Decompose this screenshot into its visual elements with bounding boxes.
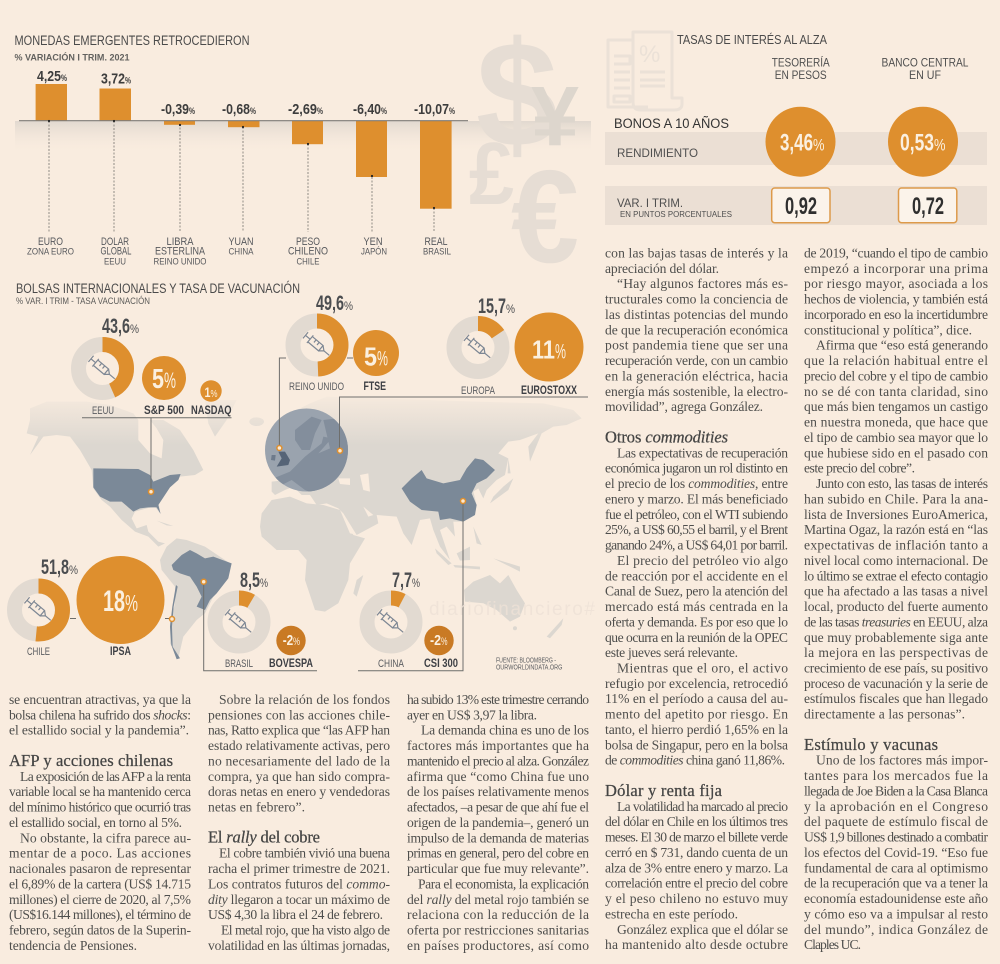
donut: Europa 15,7 bbox=[454, 324, 502, 372]
bar chart: YEN bbox=[364, 236, 383, 248]
labels: S&P 500 bbox=[144, 405, 184, 417]
bar chart: EEUU bbox=[104, 256, 126, 267]
donut: Brasil 8,5 bbox=[215, 598, 263, 646]
row label: variación: EN PUNTOS PORCENTUALES bbox=[620, 209, 732, 219]
heading: tasas: TASAS DE INTERÉS AL ALZA bbox=[677, 32, 827, 47]
article column 4: La volatilidad ha marcado al precio bbox=[617, 799, 788, 814]
article column 5: crecimiento de ese país, su positivo bbox=[804, 660, 988, 676]
bar chart: REINO UNIDO bbox=[154, 256, 206, 267]
article column 1: La exposición de las AFP a la renta bbox=[20, 769, 191, 784]
bar chart: YUAN bbox=[228, 236, 254, 248]
article column 2: pensiones con las acciones chile- bbox=[208, 707, 390, 722]
article column 5: de las tasas treasuries en EEUU, alza bbox=[804, 614, 988, 629]
labels bbox=[461, 385, 577, 397]
article column 5: Afirma que “eso está generando bbox=[816, 338, 988, 353]
value: 7,7: 7,7 bbox=[392, 569, 412, 592]
article column 5: lista de Inversiones EuroAmerica, bbox=[804, 507, 988, 522]
bar chart bbox=[19, 69, 468, 267]
value: 51,8: % bbox=[69, 563, 78, 577]
column headings: TESORERÍA bbox=[772, 56, 830, 70]
article column 4: mento del apetito por riesgo. En bbox=[605, 707, 788, 722]
labels bbox=[225, 658, 313, 670]
circle: 0,53: 0,53 bbox=[900, 130, 934, 156]
article column 5: Junto con esto, las tasas de interés bbox=[816, 476, 988, 491]
circle: NASDAQ bbox=[200, 380, 222, 402]
article column 4: post pandemia tiene que ser una bbox=[605, 338, 788, 353]
article column 4: económica jugaron un rol distinto en bbox=[605, 461, 788, 476]
heading: bolsas: BOLSAS INTERNACIONALES Y TASA DE VACUNACIÓN bbox=[16, 281, 300, 296]
article column 3: ayer en US$ 3,97 la libra. bbox=[407, 707, 537, 722]
article column 5: directamente a las personas”. bbox=[804, 707, 965, 722]
circle: 0,53 bbox=[888, 107, 958, 177]
article column 4: meses. El 30 de marzo el billete verde bbox=[605, 830, 788, 845]
group: Europa bbox=[454, 295, 584, 397]
article column 5: este precio del cobre”. bbox=[804, 461, 915, 476]
decorative currency symbols bbox=[15, 10, 591, 290]
article column 1: variable local se ha mantenido cerca bbox=[9, 784, 191, 799]
article column 5: en nuestra moneda, que hace que bbox=[804, 415, 988, 430]
article column 4: tanto, el hierro perdió 1,65% en la bbox=[605, 722, 788, 737]
bar chart: -0,39 bbox=[161, 102, 189, 118]
icon: receipt: % bbox=[639, 41, 660, 68]
decorative currency symbols: € bbox=[511, 143, 579, 290]
bar chart: -0,68 bbox=[222, 102, 250, 118]
labels: IPSA bbox=[110, 646, 131, 658]
labels: NASDAQ bbox=[191, 405, 232, 417]
article column 1: el 6,89% de la cartera (US$ 14.715 bbox=[9, 876, 191, 892]
seas bbox=[338, 473, 373, 534]
article column 5: del paquete de estímulo fiscal de bbox=[804, 814, 988, 829]
article column 2: El metal rojo, que ha visto algo de bbox=[221, 923, 390, 938]
circle: 3,46 bbox=[766, 107, 836, 177]
source note: FUENTE: BLOOMBERG - bbox=[496, 658, 556, 665]
article column 4: bolsa de Singapur, pero en la bolsa bbox=[605, 737, 788, 752]
article column 5: de 2019, “cuando el tipo de cambio bbox=[804, 246, 988, 260]
article column 5: que la relación habitual entre el bbox=[804, 353, 988, 368]
article column 4: del dólar en Chile en los últimos tres bbox=[605, 814, 788, 829]
article column 2: dity llegaron a tocar un máximo de bbox=[208, 892, 390, 907]
article column 4: Mientras que el oro, el activo bbox=[617, 660, 788, 676]
labels: FTSE bbox=[364, 381, 386, 393]
article column 5: tantes para los mercados fue la bbox=[804, 768, 988, 783]
heading: bonos: BONOS A 10 AÑOS bbox=[614, 116, 729, 131]
column headings bbox=[772, 56, 969, 82]
bar chart: 3,72 bbox=[101, 72, 125, 88]
bar chart: ZONA EURO bbox=[27, 247, 74, 258]
article column 5: nivel local como internacional. De bbox=[804, 553, 988, 568]
circle: CSI 300: -2 bbox=[430, 632, 441, 649]
article column 4: en la generación eléctrica, hacia bbox=[605, 368, 788, 384]
article column 1: mentar de a poco. Las acciones bbox=[9, 846, 191, 861]
heading: otros commodities: Otros commodities bbox=[605, 428, 728, 446]
article column 5: local, producto del fuerte aumento bbox=[804, 599, 988, 614]
article column 4: de reacción por el accidente en el bbox=[605, 568, 788, 583]
article column 5: expectativas de inflación tanto a bbox=[804, 538, 988, 552]
article column 3: relaciona con la reducción de la bbox=[407, 907, 589, 922]
bar chart: 4,25 bbox=[37, 69, 61, 85]
bar chart: PESO bbox=[296, 236, 320, 248]
watermark: diariofinanciero# bbox=[429, 599, 595, 620]
article column 2: doras netas en enero y vendedoras bbox=[208, 784, 390, 799]
row label: variación: VAR. I TRIM. bbox=[617, 196, 683, 210]
article column 3: afectados, –a pesar de que ahí fue el bbox=[407, 800, 589, 815]
donut: China 7,7 bbox=[367, 598, 415, 646]
article column 2 bbox=[208, 692, 390, 953]
donut: Chile 51,8 bbox=[14, 586, 62, 634]
box: 0,92: 0,92 bbox=[785, 193, 817, 220]
labels bbox=[92, 405, 232, 417]
article column 1: el estallido social, en torno al 5%. bbox=[9, 815, 182, 830]
article column 4: El precio del petróleo vio algo bbox=[617, 553, 788, 568]
circle: Eurostoxx: 11 bbox=[532, 334, 555, 364]
bar chart: GLOBAL bbox=[100, 246, 132, 258]
article column 4: de commodities china ganó 11,86%. bbox=[605, 753, 785, 768]
value: 8,5: % bbox=[260, 576, 268, 590]
article column 3: afirma que “como China fue uno bbox=[407, 769, 589, 784]
labels: CHILE bbox=[27, 646, 50, 658]
article column 1: el estallido social y la pandemia”. bbox=[9, 723, 189, 738]
article column 4: 25%, a US$ 60,55 el barril, y el Brent bbox=[605, 522, 788, 537]
article column 4: y el peso chileno no estuvo muy bbox=[605, 891, 788, 906]
column headings: EN UF bbox=[909, 70, 941, 82]
circle: FTSE bbox=[353, 330, 399, 376]
bar chart: CHILENO bbox=[288, 246, 328, 258]
article column 4: alza de 3% entre enero y marzo. La bbox=[605, 860, 788, 875]
article column 4: estrecha en este período. bbox=[605, 906, 738, 921]
article column 1: millones) el cierre de 2020, al 7,5% bbox=[9, 892, 191, 908]
article column 1: No obstante, la cifra parece au- bbox=[20, 830, 191, 845]
bar chart: REAL bbox=[424, 236, 448, 248]
panel: bolsas internacionales bbox=[14, 281, 595, 672]
article column 5: que ha afectado a las tasas a nivel bbox=[804, 584, 988, 599]
article column 2: Sobre la relación de los fondos bbox=[219, 692, 390, 707]
labels: EUROPA bbox=[461, 385, 495, 397]
bar chart: % bbox=[381, 106, 387, 116]
article column 3 bbox=[407, 692, 589, 953]
article column 3: La demanda china es uno de los bbox=[421, 723, 589, 738]
article column 5: y la aprobación en el Congreso bbox=[804, 799, 988, 814]
article column 3: particular que fue muy relevante”. bbox=[407, 861, 589, 876]
article column 2: estado relativamente activas, pero bbox=[208, 738, 390, 753]
article column 2: no necesariamente del lado de la bbox=[208, 754, 390, 768]
labels: CHINA bbox=[378, 658, 404, 670]
article column 5: empezó a incorporar una prima bbox=[804, 261, 988, 276]
labels: BOVESPA bbox=[269, 658, 313, 670]
bar chart: DOLAR bbox=[101, 236, 129, 248]
article column 5: que hubiese sido en el pasado con bbox=[804, 445, 988, 460]
article column 2: US$ 4,30 la libra el 24 de febrero. bbox=[208, 907, 383, 922]
value: 49,6: 49,6 bbox=[316, 292, 344, 315]
article column 2: El cobre también vivió una buena bbox=[219, 846, 390, 861]
circle: NASDAQ: 1 bbox=[204, 384, 211, 400]
article column 3: Para el economista, la explicación bbox=[418, 876, 589, 891]
bar chart: % bbox=[61, 73, 67, 83]
heading: dólar y renta fija: Dólar y renta fija bbox=[605, 781, 723, 800]
circle: CSI 300 bbox=[424, 626, 454, 655]
article column 5: constitucional y política”, dice. bbox=[804, 322, 972, 337]
row label: rendimiento: RENDIMIENTO bbox=[617, 146, 698, 160]
europe highlight circle bbox=[265, 408, 348, 492]
article column 4: ganando 24%, a US$ 64,01 por barril. bbox=[605, 538, 788, 552]
article column 4: refugio por excelencia, retrocedió bbox=[605, 676, 788, 691]
article column 4: Canal de Suez, pero la atención del bbox=[605, 584, 788, 599]
decorative currency symbols: £ bbox=[469, 124, 514, 223]
article column 4 bbox=[605, 246, 788, 952]
source note bbox=[496, 658, 562, 672]
bar chart: -2,69 bbox=[288, 102, 317, 118]
article column 2: racha el primer trimestre de 2021. bbox=[208, 861, 390, 876]
article column 5: hechos de violencia, y también está bbox=[804, 292, 988, 307]
bar chart: CHINA bbox=[228, 247, 254, 258]
heading: estímulo y vacunas: Estímulo y vacunas bbox=[804, 735, 938, 754]
heading: monedas emergentes: MONEDAS EMERGENTES RETROCEDIERON bbox=[14, 33, 250, 48]
bar chart: % bbox=[317, 106, 323, 116]
article column 4: fue el petróleo, con el WTI subiendo bbox=[605, 507, 788, 522]
article column 1: nacionales pasaron de representar bbox=[9, 861, 191, 876]
article column 4: las distintas potencias del mundo bbox=[605, 307, 788, 322]
bar chart: -6,40 bbox=[353, 102, 381, 118]
circle: FTSE: 5 bbox=[364, 342, 377, 372]
article column 1: del mínimo histórico que ocurrió tras bbox=[9, 800, 191, 815]
article column 2: nas, Ratto explica que “las AFP han bbox=[208, 723, 390, 738]
article column 3: en países productores, así como bbox=[407, 938, 589, 953]
bar chart: -10,07 bbox=[414, 102, 449, 118]
circle: 3,46: % bbox=[813, 136, 824, 154]
bar chart: JAPÓN bbox=[361, 247, 387, 258]
value: 43,6: % bbox=[130, 322, 139, 336]
map location dots bbox=[148, 446, 466, 622]
article column 4: este jueves será relevante. bbox=[605, 645, 738, 660]
circle: Eurostoxx bbox=[514, 312, 584, 382]
decorative currency symbols: ¥ bbox=[531, 69, 579, 163]
article column 5: economía estadounidense este año bbox=[804, 891, 988, 906]
bar chart: LIBRA bbox=[166, 236, 194, 248]
article column 1: (US$16.144 millones), el término de bbox=[9, 907, 191, 923]
circle: 0,53: % bbox=[934, 136, 946, 154]
article column 4: ha mantenido alto desde octubre bbox=[605, 937, 788, 952]
labels: REINO UNIDO bbox=[289, 381, 344, 393]
donut: Reino Unido 49,6 bbox=[293, 321, 341, 369]
article column 4: mercado está más centrada en la bbox=[605, 599, 788, 614]
article column 4: que ocurra en la reunión de la OPEC bbox=[605, 630, 788, 645]
value: 15,7: % bbox=[506, 302, 515, 316]
article column 3: impulso de la demanda de materias bbox=[407, 830, 589, 845]
article column 5: que muy probablemente siga ante bbox=[804, 630, 988, 645]
article column 4: cerró en $ 731, dando cuenta de un bbox=[605, 845, 788, 860]
article column 5: por riesgo mayor, asociada a los bbox=[804, 276, 988, 291]
article column 4: recuperación verde, con un cambio bbox=[605, 353, 788, 368]
article column 3: ha subido 13% este trimestre cerrando bbox=[407, 692, 589, 707]
article column 4: movilidad”, agrega González. bbox=[605, 399, 763, 414]
labels: EUROSTOXX bbox=[521, 385, 577, 397]
article column 5: no se dé con tanta claridad, sino bbox=[804, 384, 988, 399]
article column 1 bbox=[9, 692, 191, 953]
group: China bbox=[367, 569, 458, 670]
article column 4: enero y marzo. El más beneficiado bbox=[605, 491, 788, 506]
article column 4: correlación entre el precio del cobre bbox=[605, 876, 788, 891]
article column 1: febrero, según datos de la Superin- bbox=[9, 923, 191, 938]
bar chart: % bbox=[189, 106, 195, 116]
bar chart: CHILE bbox=[296, 256, 320, 267]
labels: BRASIL bbox=[225, 658, 253, 670]
article column 4: “Hay algunos factores más es- bbox=[617, 276, 788, 291]
circle: S&P 500: 5 bbox=[152, 363, 164, 394]
bar chart: BRASIL bbox=[423, 247, 451, 258]
row label: variación bbox=[617, 196, 732, 219]
subheading: variación: % VARIACIÓN I TRIM. 2021 bbox=[14, 52, 130, 62]
panel: tasas de interés bbox=[605, 32, 987, 225]
article column 4: apreciación del dólar. bbox=[605, 261, 719, 276]
article column 5: los efectos del Covid-19. “Eso fue bbox=[804, 845, 988, 860]
article column 5: de la recuperación que va a tener la bbox=[804, 876, 988, 891]
article column 5: fundamental de cara al optimismo bbox=[804, 860, 988, 875]
circle: Bovespa bbox=[276, 626, 306, 655]
article column 2: compra, ya que han sido compra- bbox=[208, 769, 390, 784]
article column 5: incorporado en eso la incertidumbre bbox=[804, 307, 988, 322]
article column 2: volatilidad en las últimas jornadas, bbox=[208, 938, 390, 953]
article column 3: origen de la pandemia–, generó un bbox=[407, 815, 589, 830]
article column 5: el tipo de cambio sea mayor que lo bbox=[804, 430, 988, 445]
article column 5: estímulos fiscales que han llegado bbox=[804, 691, 988, 706]
group: EEUU bbox=[78, 315, 232, 417]
box: 0,72 bbox=[898, 188, 957, 223]
highlighted countries bbox=[93, 458, 495, 659]
circle: CSI 300: % bbox=[441, 636, 448, 648]
column headings: BANCO CENTRAL bbox=[882, 58, 969, 70]
article column 5: lo último se extrae el efecto contagio bbox=[804, 568, 988, 583]
article column 4: el precio de los commodities, entre bbox=[605, 476, 788, 491]
group: Reino Unido bbox=[289, 292, 399, 393]
article column 5: llegada de Joe Biden a la Casa Blanca bbox=[804, 784, 988, 798]
decorative currency symbols: $ bbox=[476, 10, 558, 178]
article column 5 bbox=[804, 246, 988, 952]
bar chart: % bbox=[125, 76, 131, 86]
bar chart: ESTERLINA bbox=[155, 246, 206, 258]
labels: CSI 300 bbox=[424, 658, 458, 670]
article column 3: primas en general, pero del cobre en bbox=[407, 846, 589, 861]
article column 3: del rally del metal rojo también se bbox=[407, 892, 589, 907]
article column 2: Los contratos futuros del commo- bbox=[208, 876, 390, 891]
article column 5: del mundo”, indica González de bbox=[804, 922, 988, 937]
leader lines bbox=[70, 358, 588, 671]
article column 1: se encuentran atractivas, ya que la bbox=[9, 692, 191, 707]
labels: EEUU bbox=[92, 405, 114, 417]
icon: receipt bbox=[608, 32, 682, 110]
bar chart: EURO bbox=[38, 236, 63, 248]
circle: IPSA bbox=[76, 556, 164, 644]
value: 51,8: 51,8 bbox=[41, 556, 69, 579]
article column 3: de los países relativamente menos bbox=[407, 784, 589, 799]
circle: S&P 500: % bbox=[164, 368, 176, 393]
article column 4: tructurales como la conciencia de bbox=[605, 292, 788, 307]
circle: IPSA: 18 bbox=[103, 585, 125, 618]
heading: AFP: AFP y acciones chilenas bbox=[9, 751, 173, 770]
article column 3: mantenido el precio al alza. González bbox=[407, 754, 589, 768]
column headings: EN PESOS bbox=[775, 70, 827, 82]
article column 2: netas en febrero”. bbox=[208, 800, 305, 815]
circle: FTSE: % bbox=[377, 348, 388, 370]
article column 5: proceso de vacunación y la serie de bbox=[804, 676, 988, 691]
circle: Bovespa: -2 bbox=[283, 632, 293, 649]
bar chart: % bbox=[449, 106, 455, 116]
value: 49,6: % bbox=[344, 299, 353, 313]
heading: rally del cobre: El rally del cobre bbox=[208, 828, 320, 846]
article column 1: tendencia de Pensiones. bbox=[9, 938, 137, 953]
panel: monedas emergentes bbox=[14, 33, 468, 267]
article column 4: Las expectativas de recuperación bbox=[617, 445, 788, 460]
value: 15,7: 15,7 bbox=[478, 295, 506, 318]
source note: OURWORLDINDATA.ORG bbox=[496, 664, 562, 672]
circle: NASDAQ: % bbox=[210, 389, 218, 400]
article column 5: precio del cobre y el tipo de cambio bbox=[804, 368, 988, 384]
world map bbox=[26, 406, 582, 660]
group: Brasil bbox=[215, 569, 313, 670]
circle: S&P 500 bbox=[142, 356, 186, 400]
article column 4: oferta y demanda. Es por eso que lo bbox=[605, 614, 788, 629]
value: 8,5: 8,5 bbox=[240, 569, 260, 592]
article column 1: bolsa chilena ha sufrido dos shocks: bbox=[9, 707, 191, 722]
labels bbox=[27, 646, 131, 658]
group: Chile bbox=[14, 556, 164, 658]
article column 5: Claples UC. bbox=[804, 937, 861, 952]
donut: EEUU 43,6 bbox=[78, 344, 126, 392]
bar chart: % bbox=[250, 106, 256, 116]
article column 5: y cómo eso va a impulsar al resto bbox=[804, 906, 988, 921]
article column 5: han subido en Chile. Para la ana- bbox=[804, 491, 988, 506]
circle: 3,46: 3,46 bbox=[780, 130, 813, 156]
article column 4: González explica que el dólar se bbox=[617, 922, 788, 937]
article column 5: Uno de los factores más impor- bbox=[816, 753, 988, 768]
value: 43,6: 43,6 bbox=[102, 315, 130, 338]
circle: Eurostoxx: % bbox=[555, 340, 566, 364]
article column 3: oferta por restricciones sanitarias bbox=[407, 923, 589, 938]
article column 4: energía más sostenible, la electro- bbox=[605, 384, 788, 399]
article column 5: US$ 1,9 billones destinado a combatir bbox=[804, 830, 988, 845]
article column 4: con las bajas tasas de interés y la bbox=[605, 246, 788, 260]
article column 5: Martina Ogaz, la razón está en “las bbox=[804, 522, 988, 537]
article column 3: factores más importantes que ha bbox=[407, 738, 589, 753]
article column 4: 11% en el período a causa del au- bbox=[605, 691, 788, 706]
value: 7,7: % bbox=[412, 576, 420, 590]
article column 5: la mejora en las perspectivas de bbox=[804, 645, 988, 660]
row bands bbox=[605, 132, 987, 225]
box: 0,92 bbox=[772, 188, 830, 223]
labels bbox=[378, 658, 458, 670]
circle: IPSA: % bbox=[125, 590, 138, 616]
circle: Bovespa: % bbox=[293, 636, 300, 648]
article column 5: que más bien tengamos un castigo bbox=[804, 399, 988, 414]
box: 0,72: 0,72 bbox=[912, 193, 944, 220]
article column 4: de que la recuperación económica bbox=[605, 322, 788, 337]
subheading: tasa de vacunación: % VAR. I TRIM - TASA VACUNACIÓN bbox=[16, 296, 150, 306]
